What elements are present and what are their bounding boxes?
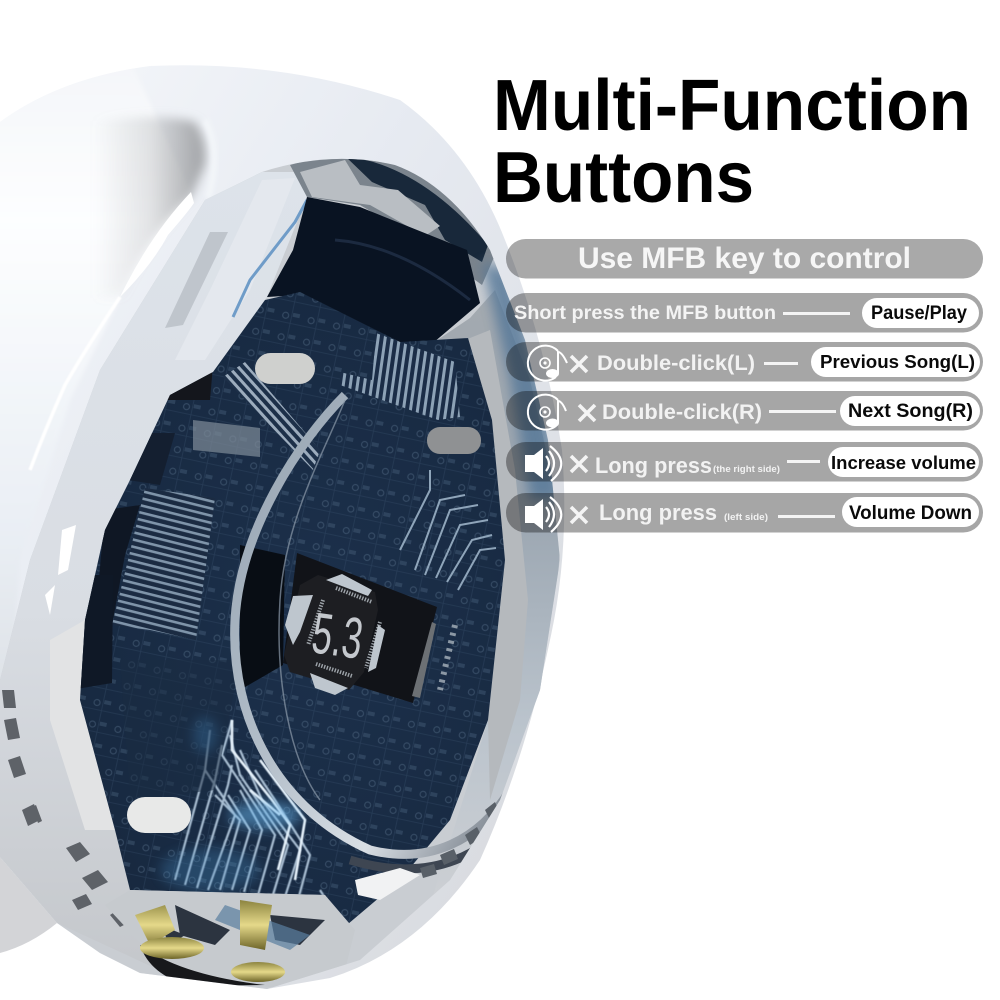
left dark module lower (80, 575, 113, 688)
connector (783, 312, 850, 315)
shell surface shading (0, 114, 210, 678)
white rim flecks (45, 525, 76, 615)
icon: times (571, 356, 587, 372)
action label: Double-click(L) (597, 352, 755, 375)
pill button lower right (355, 868, 420, 900)
row background (506, 493, 983, 532)
result pill (862, 298, 979, 328)
pill button lower left (127, 797, 191, 833)
gold contacts (135, 900, 272, 950)
result label: Increase volume (831, 453, 976, 473)
cavity base (0, 150, 570, 1000)
blue glow (229, 801, 301, 829)
speaker block highlight (335, 240, 470, 300)
side note: (left side) (724, 512, 768, 522)
title line 1: Multi-Function (493, 66, 971, 146)
icon: music disc (528, 395, 566, 430)
header text: Use MFB key to control (578, 242, 911, 275)
diagonal trace block (223, 362, 320, 470)
result pill (842, 497, 979, 527)
blue glow left (193, 717, 217, 753)
circuit board (80, 292, 505, 923)
pill button right (427, 427, 481, 454)
title line 2: Buttons (493, 138, 754, 218)
left band slot (165, 232, 228, 328)
row background (506, 293, 983, 332)
header pill (506, 239, 983, 278)
blue tint on right edge (482, 262, 560, 500)
earbud illustration (0, 60, 570, 1000)
right gray band (438, 290, 560, 792)
blue glow lower (160, 848, 260, 892)
row: double-click right (506, 391, 983, 430)
connector (764, 362, 798, 365)
result label: Volume Down (849, 503, 972, 524)
icon: speaker (525, 497, 561, 532)
rim pattern lower (420, 802, 500, 878)
gold speaker left (140, 937, 204, 959)
left lobe (0, 142, 174, 678)
result label: Next Song(R) (848, 401, 973, 422)
row: long press left (506, 493, 983, 532)
chip side reflectors (285, 574, 385, 695)
upper trace block (340, 333, 460, 420)
translucent bracket (193, 420, 260, 457)
rim inner curve (279, 400, 345, 800)
lens rim (235, 395, 550, 854)
chip body (284, 575, 378, 690)
lower left component area (120, 660, 240, 800)
housing dark pattern (160, 905, 325, 945)
left band lower lighter strip (50, 620, 115, 830)
icon: speaker (525, 446, 561, 481)
header pill background (506, 239, 983, 278)
left band lighter strip (176, 286, 252, 360)
action label: Double-click(R) (602, 401, 762, 424)
right trace block (400, 470, 496, 590)
bottom reflective housing (105, 890, 355, 990)
left dark module middle (99, 505, 140, 622)
left band dark pattern (2, 690, 132, 927)
chip carrier (283, 553, 437, 703)
black speaker block (267, 197, 480, 343)
icon: music disc (528, 346, 567, 381)
lower trace fan (174, 719, 326, 896)
result pill (811, 347, 980, 377)
chip pins (308, 588, 380, 676)
title (493, 66, 971, 218)
connector (778, 515, 835, 518)
connector (769, 410, 836, 413)
left trace block (112, 488, 215, 640)
icon: times (579, 405, 595, 421)
right connector (412, 622, 436, 698)
inner right light strip (465, 330, 528, 800)
result pill (828, 447, 979, 477)
blue trace reflection (215, 905, 310, 950)
action label: Short press the MFB button (514, 303, 776, 324)
pill button top left (255, 353, 315, 384)
white streak (30, 297, 120, 470)
gold speaker right (231, 962, 285, 982)
connector (787, 460, 820, 463)
row: short press (506, 293, 983, 332)
row background (506, 342, 983, 382)
row: long press right (506, 442, 983, 482)
dark center module (240, 545, 285, 690)
result label: Previous Song(L) (820, 352, 975, 372)
glowing traces (232, 720, 305, 880)
icon: times (571, 456, 587, 472)
top dark reflection (345, 156, 488, 262)
side note: (the right side) (713, 464, 780, 474)
speaker grille (140, 945, 265, 986)
left dark module upper (128, 433, 175, 485)
earbud outer shell (0, 65, 564, 989)
rim lower dark edge (350, 795, 528, 869)
transparent cavity (0, 150, 570, 1000)
left inner band (0, 172, 307, 750)
row background (506, 442, 983, 482)
hook shadow (112, 114, 210, 290)
right pin column (440, 625, 455, 690)
action label: Long press (599, 500, 717, 525)
board base (80, 292, 505, 923)
icon: times (571, 507, 587, 523)
bluetooth chip (283, 553, 455, 703)
action label: Long press (595, 453, 712, 478)
component texture (80, 292, 504, 922)
row: double-click left (506, 342, 983, 382)
result label: Pause/Play (871, 303, 967, 324)
result pill (840, 396, 980, 426)
hook fold (210, 139, 214, 164)
hook opening (120, 192, 194, 297)
rear lobe behind earbud (0, 857, 57, 953)
chip label: 5.3 (308, 601, 367, 672)
black clip at board top (168, 372, 212, 400)
top reflective band (290, 158, 495, 285)
top light reflection (300, 160, 440, 236)
blue edge strip (233, 200, 307, 317)
row background (506, 391, 983, 430)
